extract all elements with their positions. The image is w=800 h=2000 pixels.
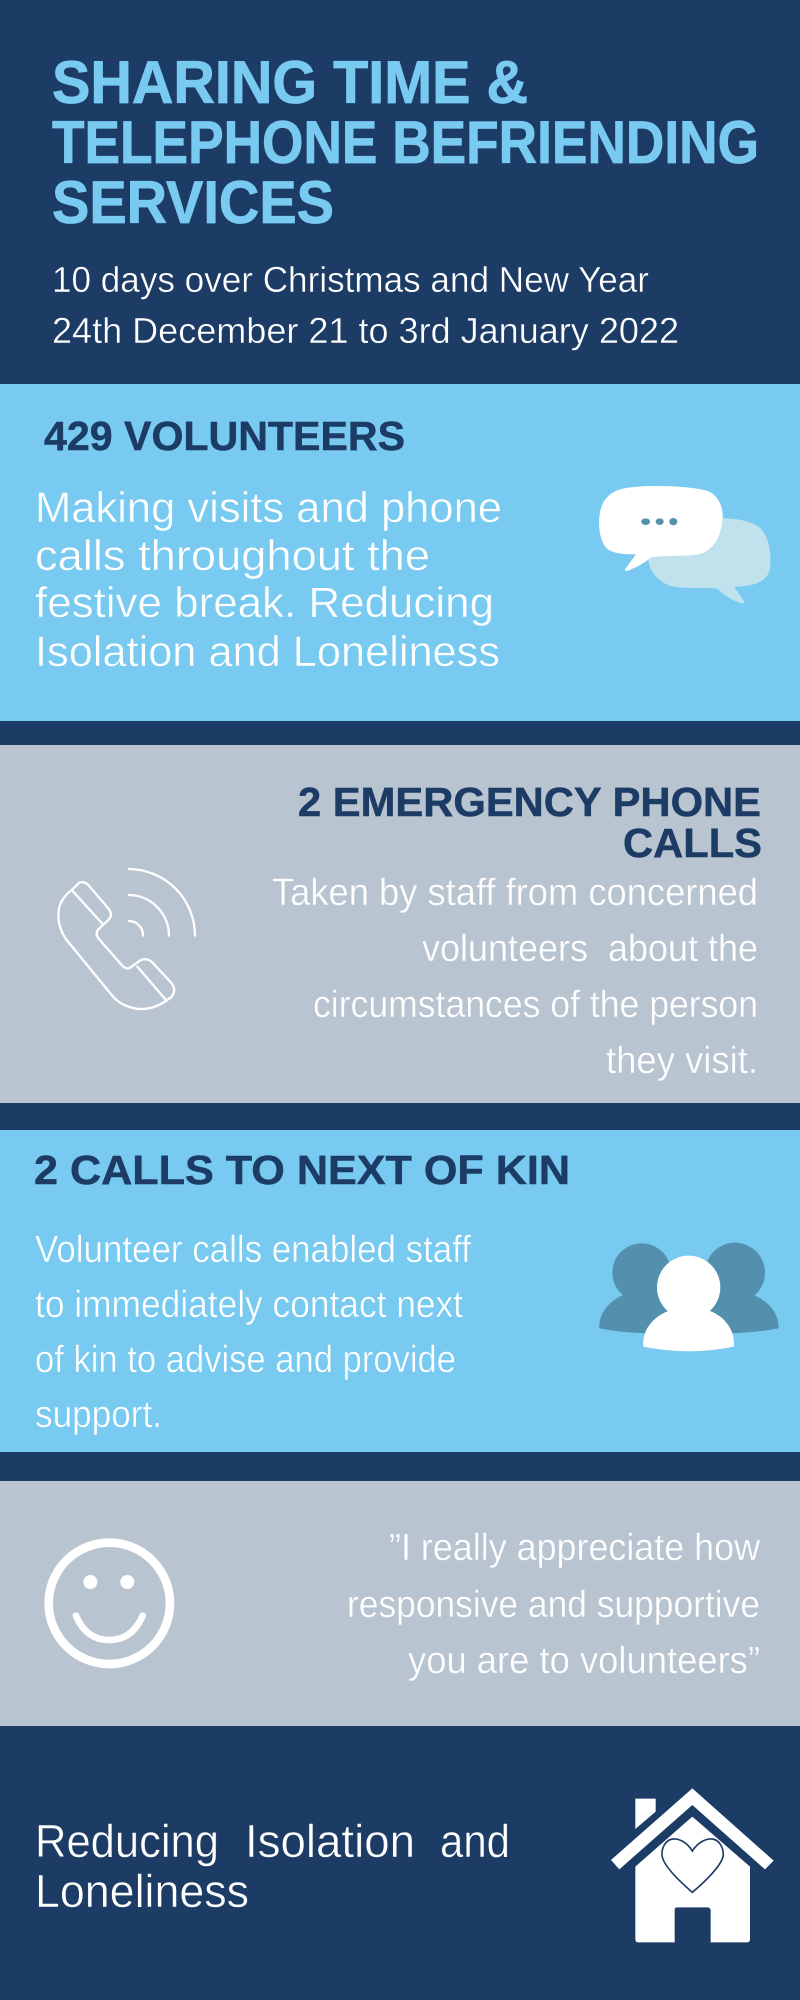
text block: volunteers description: Making visits and phone: [35, 484, 502, 532]
text block: next of kin description: of kin to advise and provide: [35, 1339, 456, 1381]
text block: emergency description: volunteers about the: [422, 928, 758, 970]
text block: emergency description: [272, 872, 758, 1082]
heading: 429 volunteers: 429 VOLUNTEERS: [44, 413, 405, 459]
icon: telephone handset: [58, 869, 195, 1009]
panel: footer: [0, 1726, 800, 2000]
heading: 2 calls to next of kin: 2 CALLS TO NEXT OF KIN: [34, 1147, 570, 1193]
icon: speech bubbles: [599, 486, 771, 604]
quote text: responsive and supportive: [347, 1584, 760, 1626]
footer text: and: [440, 1815, 510, 1867]
text block: volunteers description: calls throughout the: [35, 532, 430, 580]
text block: volunteers description: Isolation and Loneliness: [35, 628, 500, 676]
text block: next of kin description: to immediately contact next: [35, 1284, 463, 1326]
text block: volunteers description: festive break. Reducing: [35, 579, 494, 627]
heading: 2 emergency phone calls: CALLS: [623, 820, 762, 866]
footer text: [35, 1815, 510, 1917]
heading: 2 emergency phone calls: [298, 779, 762, 866]
panel: header: [0, 0, 800, 384]
title: SERVICES: [52, 169, 334, 236]
footer text: Loneliness: [35, 1865, 249, 1917]
panel: volunteer quote: [0, 1481, 800, 1726]
text block: emergency description: they visit.: [606, 1040, 758, 1082]
title: SHARING TIME &: [52, 49, 528, 116]
icon: group of people: [599, 1243, 778, 1351]
subtitle: dates: 24th December 21 to 3rd January 2022: [52, 310, 679, 351]
subtitle: dates: [52, 259, 679, 351]
panel: next of kin: [0, 1130, 800, 1452]
quote text: [347, 1527, 761, 1682]
text block: volunteers description: [35, 484, 502, 676]
title: [52, 49, 759, 236]
quote text: ”I really appreciate how: [389, 1527, 761, 1569]
text block: next of kin description: Volunteer calls enabled staff: [35, 1229, 471, 1271]
icon: house with heart: [611, 1788, 774, 1942]
footer text: Isolation: [245, 1815, 415, 1867]
quote text: you are to volunteers”: [408, 1640, 760, 1682]
panel: volunteers: [0, 384, 800, 721]
panel: emergency calls: [0, 745, 800, 1103]
subtitle: dates: 10 days over Christmas and New Year: [52, 259, 649, 300]
icon: smiley face: [49, 1543, 170, 1664]
text block: emergency description: Taken by staff from concerned: [272, 872, 758, 914]
text block: next of kin description: support.: [35, 1394, 162, 1436]
footer text: Reducing: [35, 1815, 219, 1867]
heading: 2 emergency phone calls: 2 EMERGENCY PHONE: [298, 779, 761, 825]
text block: emergency description: circumstances of the person: [313, 984, 758, 1026]
text block: next of kin description: [35, 1229, 471, 1436]
